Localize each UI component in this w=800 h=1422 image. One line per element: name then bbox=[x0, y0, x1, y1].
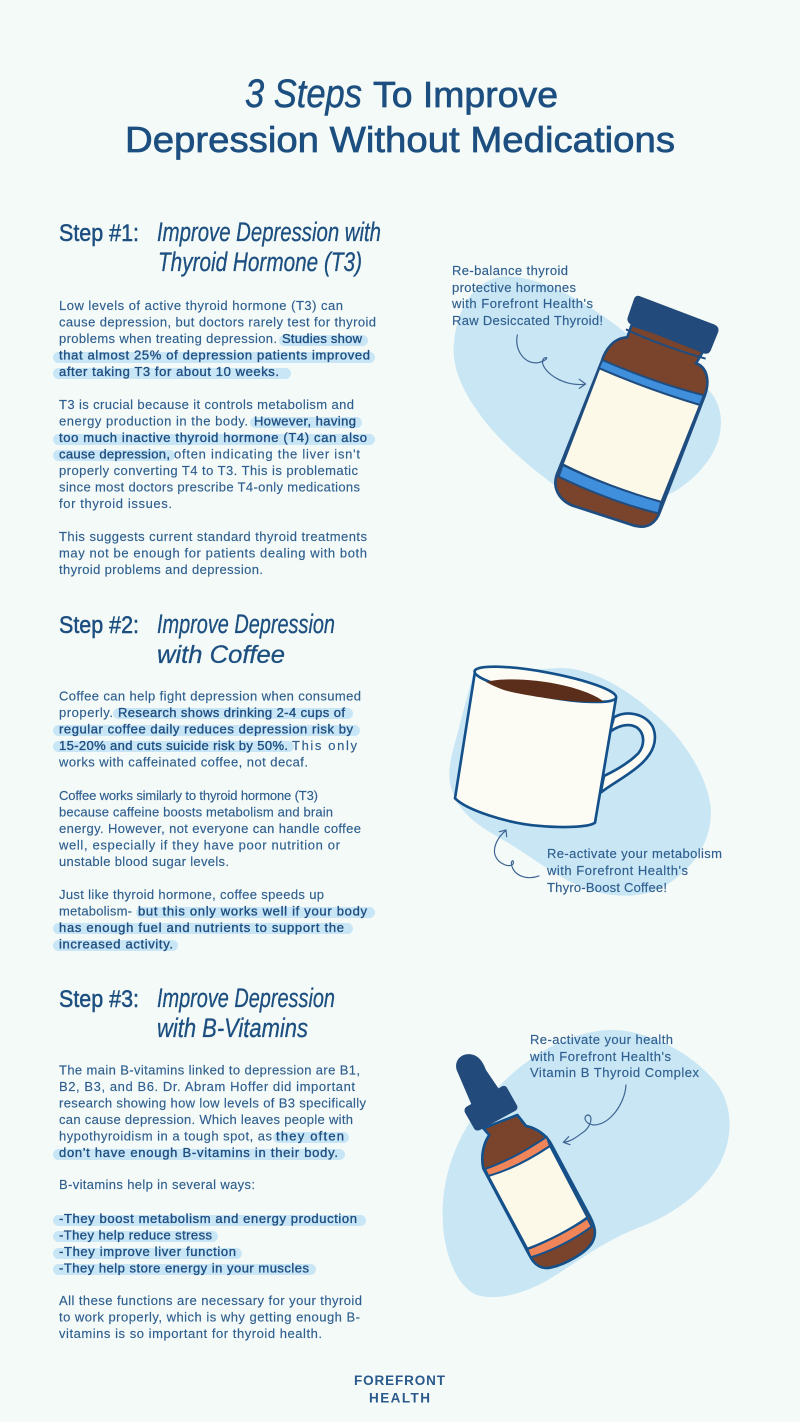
text block: step 2 paragraph 1: works with caffeinated coffee, not decaf. bbox=[58, 754, 308, 770]
heading: step 3: Step #3: bbox=[59, 986, 139, 1013]
panel: step 3 illustration blob bbox=[443, 1030, 730, 1297]
top band bbox=[599, 360, 704, 405]
callout: step 2: with Forefront Health's bbox=[546, 863, 688, 878]
text block: step 2 paragraph 2: because caffeine boosts metabolism and brain bbox=[59, 804, 333, 820]
heading: step 3: Improve Depression bbox=[157, 983, 335, 1013]
text block: step 3 list: -They help reduce stress bbox=[59, 1228, 212, 1242]
text block: step 3 closing paragraph: All these functions are necessary for your thyroid bbox=[59, 1293, 362, 1308]
text block: step 1 paragraph 1 bbox=[59, 298, 376, 379]
text block: step 1 paragraph 1: problems when treating depression. bbox=[59, 331, 277, 346]
bottom band bbox=[559, 465, 661, 513]
title: Depression Without Medications bbox=[125, 119, 675, 160]
text block: step 3 paragraph 1: research showing how low levels of B3 specifically bbox=[59, 1096, 366, 1110]
text block: step 2 paragraph 1: properly. bbox=[59, 705, 113, 720]
callout: step 2 bbox=[546, 846, 722, 895]
text block: step 2 paragraph 3: Just like thyroid hormone, coffee speeds up bbox=[59, 887, 324, 902]
highlights: step 1 bbox=[53, 335, 375, 461]
text block: step 3 paragraph 1: they often bbox=[276, 1128, 344, 1144]
text block: step 3 list: -They improve liver function bbox=[59, 1244, 236, 1259]
text block: step 3 list bbox=[59, 1211, 357, 1276]
text block: step 3 paragraph 1: can cause depression. Which leaves people with bbox=[59, 1112, 353, 1127]
title: To Improve bbox=[373, 74, 558, 115]
text block: step 2 paragraph 1 bbox=[58, 688, 361, 770]
bottle label bbox=[488, 1146, 587, 1249]
mug handle bbox=[601, 714, 655, 793]
icon: coffee mug bbox=[455, 659, 655, 827]
panel: step 2 illustration blob bbox=[449, 668, 711, 896]
bottom band bbox=[527, 1218, 592, 1257]
dropper bulb bbox=[456, 1054, 501, 1107]
title bbox=[125, 72, 675, 160]
text block: step 1 paragraph 3: thyroid problems and depression. bbox=[59, 562, 263, 577]
text block: step 2 paragraph 1: 15-20% and cuts suicide risk by 50%. bbox=[59, 738, 288, 753]
title: 3 Steps bbox=[245, 72, 362, 116]
text block: step 2 paragraph 1: regular coffee daily reduces depression risk by bbox=[59, 722, 354, 736]
text block: step 1 paragraph 3: This suggests current standard thyroid treatments bbox=[59, 529, 368, 544]
bottle label bbox=[563, 368, 700, 502]
text block: step 1 paragraph 2: However, having bbox=[254, 414, 356, 428]
bottle glass bbox=[482, 1115, 595, 1268]
arrow: step 1 callout bbox=[517, 335, 586, 388]
heading: step 1 bbox=[59, 217, 381, 277]
logo: Forefront Health: FOREFRONT bbox=[354, 1373, 446, 1388]
coffee bbox=[486, 679, 604, 702]
callout: step 3 bbox=[529, 1032, 700, 1080]
text block: step 1 paragraph 2: properly converting T4 to T3. This is problematic bbox=[59, 463, 358, 478]
heading: step 3: with B-Vitamins bbox=[157, 1013, 308, 1043]
text block: step 3 list: -They help store energy in your muscles bbox=[59, 1260, 310, 1276]
text block: step 2 paragraph 3: has enough fuel and nutrients to support the bbox=[59, 920, 344, 935]
callout: step 2: Thyro-Boost Coffee! bbox=[547, 880, 667, 895]
text block: step 3 list intro: B-vitamins help in several ways: bbox=[59, 1177, 255, 1192]
text block: step 1 paragraph 1: after taking T3 for about 10 weeks. bbox=[59, 364, 279, 379]
text block: step 2 paragraph 1: This only bbox=[292, 738, 358, 753]
top band bbox=[485, 1137, 550, 1176]
callout: step 1: with Forefront Health's bbox=[451, 296, 594, 311]
callout: step 3: Re-activate your health bbox=[530, 1032, 673, 1047]
icon: thyroid supplement bottle bbox=[555, 296, 719, 527]
callout: step 1 bbox=[451, 263, 603, 328]
heading: step 1: Step #1: bbox=[59, 220, 139, 247]
text block: step 1 paragraph 2: cause depression, bbox=[59, 446, 170, 462]
logo: Forefront Health: HEALTH bbox=[369, 1390, 430, 1406]
text block: step 3 paragraph 1: hypothyroidism in a tough spot, as bbox=[59, 1128, 272, 1144]
text block: step 1 paragraph 1: cause depression, but doctors rarely test for thyroid bbox=[59, 314, 376, 330]
text block: step 2 paragraph 2 bbox=[58, 788, 361, 869]
heading: step 2: Step #2: bbox=[59, 612, 139, 639]
text block: step 3 paragraph 1: B2, B3, and B6. Dr. Abram Hoffer did important bbox=[59, 1079, 355, 1094]
text block: step 1 paragraph 2: for thyroid issues. bbox=[59, 496, 172, 511]
text block: step 1 paragraph 1: Low levels of active thyroid hormone (T3) can bbox=[59, 298, 343, 313]
text block: step 2 paragraph 3: increased activity. bbox=[59, 936, 173, 952]
text block: step 3 closing paragraph: vitamins is so important for thyroid health. bbox=[59, 1326, 322, 1341]
heading: step 1: Improve Depression with bbox=[157, 217, 381, 247]
text block: step 1 paragraph 1: that almost 25% of depression patients improved bbox=[59, 348, 370, 362]
bottle cap bbox=[627, 296, 719, 354]
icon: dropper bottle bbox=[456, 1054, 595, 1268]
text block: step 1 paragraph 3 bbox=[59, 529, 368, 577]
bottle glass bbox=[555, 325, 707, 527]
text block: step 3 paragraph 1 bbox=[59, 1062, 366, 1160]
text block: step 2 paragraph 2: unstable blood sugar levels. bbox=[59, 854, 229, 869]
text block: step 3 closing paragraph bbox=[59, 1293, 362, 1341]
heading: step 2: with Coffee bbox=[157, 641, 285, 669]
text block: step 1 paragraph 2: too much inactive thyroid hormone (T4) can also bbox=[59, 430, 367, 445]
logo: Forefront Health bbox=[354, 1373, 446, 1406]
text block: step 3 paragraph 1: The main B-vitamins linked to depression are B1, bbox=[59, 1062, 360, 1078]
text block: step 1 paragraph 1: Studies show bbox=[282, 331, 363, 346]
text block: step 3 list: -They boost metabolism and energy production bbox=[59, 1211, 357, 1226]
heading: step 2 bbox=[59, 609, 335, 669]
arrow: step 2 callout bbox=[494, 830, 539, 878]
callout: step 1: Raw Desiccated Thyroid! bbox=[452, 313, 603, 328]
text block: step 2 paragraph 2: well, especially if they have poor nutrition or bbox=[58, 838, 341, 852]
text block: step 2 paragraph 3: but this only works well if your body bbox=[138, 904, 368, 918]
mug rim bbox=[472, 659, 618, 709]
callout: step 3: with Forefront Health's bbox=[529, 1049, 672, 1064]
neck ring bbox=[626, 329, 706, 359]
panel: step 3 bbox=[53, 983, 366, 1341]
text block: step 1 paragraph 2: energy production in the body. bbox=[59, 414, 248, 428]
text block: step 3 closing paragraph: to work properly, which is why getting enough B- bbox=[59, 1310, 360, 1324]
mug body bbox=[455, 672, 616, 827]
text block: step 1 paragraph 2 bbox=[59, 397, 367, 511]
callout: step 3: Vitamin B Thyroid Complex bbox=[530, 1065, 700, 1080]
panel: step 2 bbox=[53, 609, 375, 952]
highlights: step 2 bbox=[53, 708, 375, 951]
panel: step 1 illustration blob bbox=[454, 277, 721, 498]
text block: step 2 paragraph 2: energy. However, not everyone can handle coffee bbox=[59, 821, 361, 836]
text block: step 1 paragraph 2: since most doctors prescribe T4-only medications bbox=[59, 480, 360, 494]
arrow: step 3 callout bbox=[563, 1085, 626, 1145]
text block: step 2 paragraph 1: Coffee can help fight depression when consumed bbox=[59, 688, 361, 704]
dropper collar bbox=[465, 1086, 517, 1131]
text block: step 1 paragraph 3: may not be enough for patients dealing with both bbox=[59, 546, 367, 560]
text block: step 2 paragraph 2: Coffee works similarly to thyroid hormone (T3) bbox=[59, 788, 318, 803]
text block: step 3 paragraph 1: don't have enough B-vitamins in their body. bbox=[59, 1145, 338, 1160]
text block: step 2 paragraph 3 bbox=[59, 887, 368, 952]
heading: step 2: Improve Depression bbox=[157, 609, 335, 639]
text block: step 2 paragraph 3: metabolism- bbox=[59, 904, 132, 918]
text block: step 1 paragraph 2: often indicating the liver isn't bbox=[174, 446, 360, 462]
heading: step 1: Thyroid Hormone (T3) bbox=[158, 247, 362, 277]
callout: step 1: protective hormones bbox=[452, 280, 576, 295]
text block: step 1 paragraph 2: T3 is crucial because it controls metabolism and bbox=[59, 397, 354, 412]
panel: step 1 bbox=[53, 217, 381, 577]
callout: step 2: Re-activate your metabolism bbox=[547, 846, 722, 861]
heading: step 3 bbox=[59, 983, 335, 1043]
callout: step 1: Re-balance thyroid bbox=[452, 263, 568, 278]
highlights: step 3 bbox=[53, 1132, 366, 1275]
text block: step 2 paragraph 1: Research shows drinking 2-4 cups of bbox=[118, 705, 345, 720]
